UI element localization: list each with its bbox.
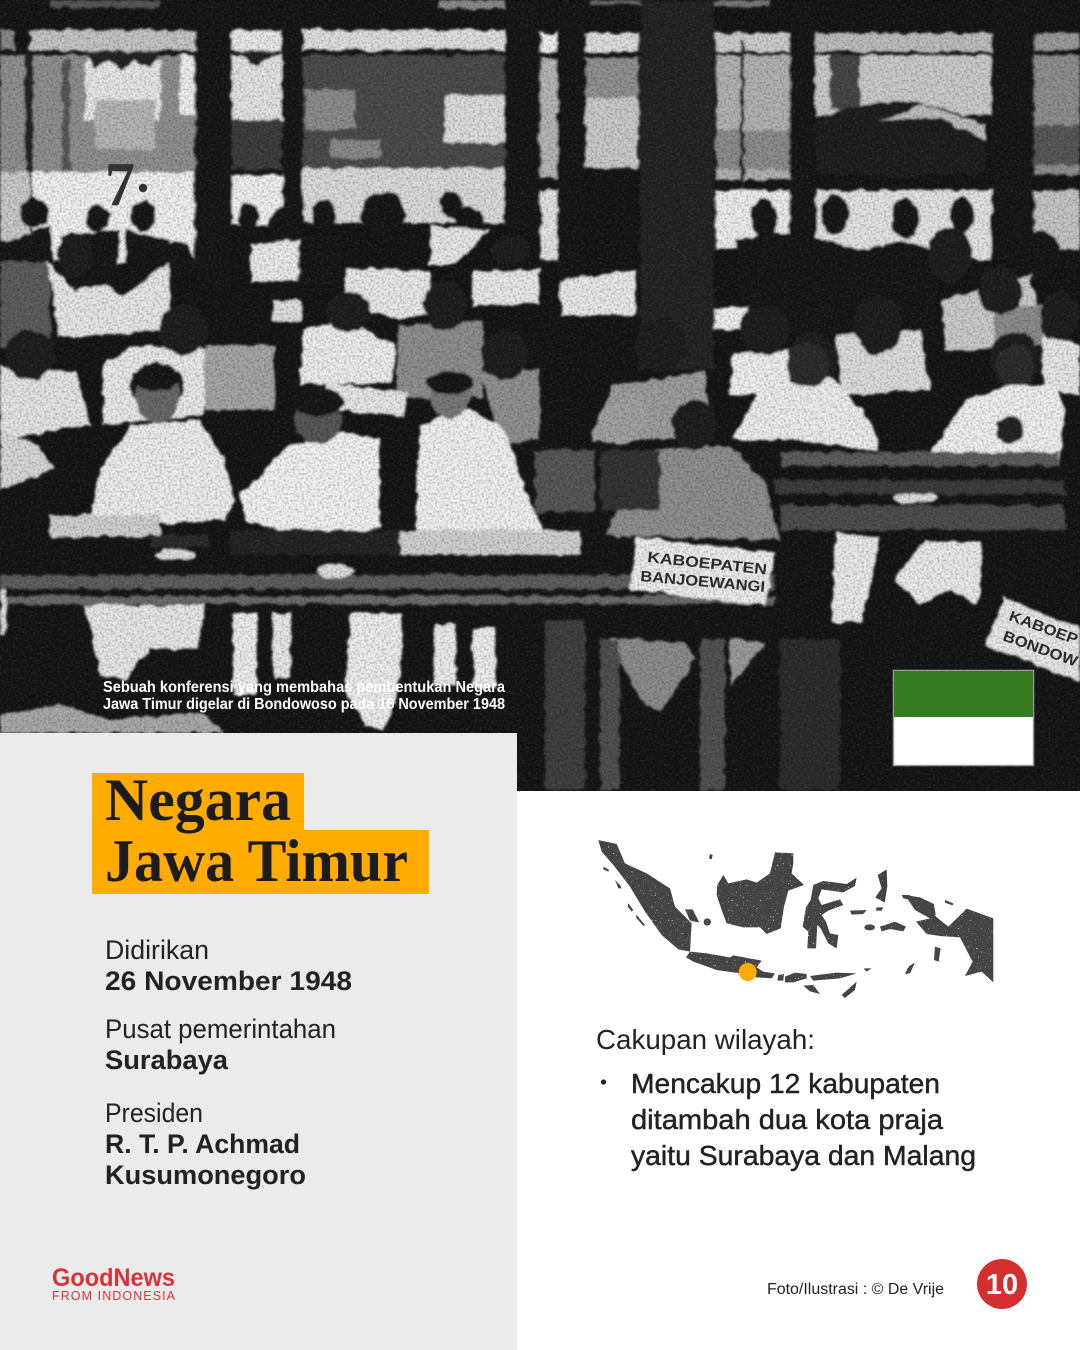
photo: conference in Bondowoso: KABOEP [1007,608,1080,648]
text: territory coverage: ditambah dua kota praja [631,1104,943,1135]
text: territory coverage: Mencakup 12 kabupaten [631,1068,940,1099]
fact: capital [105,1014,336,1075]
text: territory coverage [596,1024,976,1171]
photo: conference in Bondowoso: BONDOW [1001,628,1080,671]
title highlight and heading [92,767,429,894]
fact: capital: Surabaya [105,1045,229,1075]
fact: capital: Pusat pemerintahan [105,1014,336,1044]
photo: conference in Bondowoso [0,0,1080,791]
logo: GoodNews from Indonesia: FROM INDONESIA [52,1289,176,1303]
map of Indonesia with East Java marker [590,830,1000,1005]
photo: conference in Bondowoso: BANJOEWANGI [640,568,766,596]
photo caption: Jawa Timur digelar di Bondowoso pada 16 November 1948 [103,696,505,713]
fact: founded: Didirikan [105,935,209,965]
panel: state facts [0,733,517,1350]
page number badge [977,1259,1027,1309]
photo credit: Foto/Ilustrasi : © De Vrije [767,1281,944,1298]
fact: founded: 26 November 1948 [105,966,352,996]
photo caption [103,679,505,713]
page number badge: 10 [986,1269,1018,1301]
logo: GoodNews from Indonesia [52,1264,176,1303]
logo: GoodNews from Indonesia: GoodNews [52,1264,175,1292]
section number: 7 [105,151,135,219]
text: territory coverage: yaitu Surabaya dan Malang [631,1140,976,1171]
fact: president [105,1098,306,1190]
fact: founded [105,935,352,996]
fact: president: Kusumonegoro [105,1160,306,1190]
text: territory coverage: Cakupan wilayah: [596,1024,815,1055]
icon: flag of East Java [894,670,1034,766]
photo caption: Sebuah konferensi yang membahas pembentukan Negara [103,679,505,696]
title highlight and heading: Jawa Timur [105,828,408,894]
title highlight and heading: Negara [105,767,291,833]
fact: president: Presiden [105,1098,203,1128]
photo: conference in Bondowoso: KABOEPATEN [647,549,768,579]
fact: president: R. T. P. Achmad [105,1129,300,1159]
